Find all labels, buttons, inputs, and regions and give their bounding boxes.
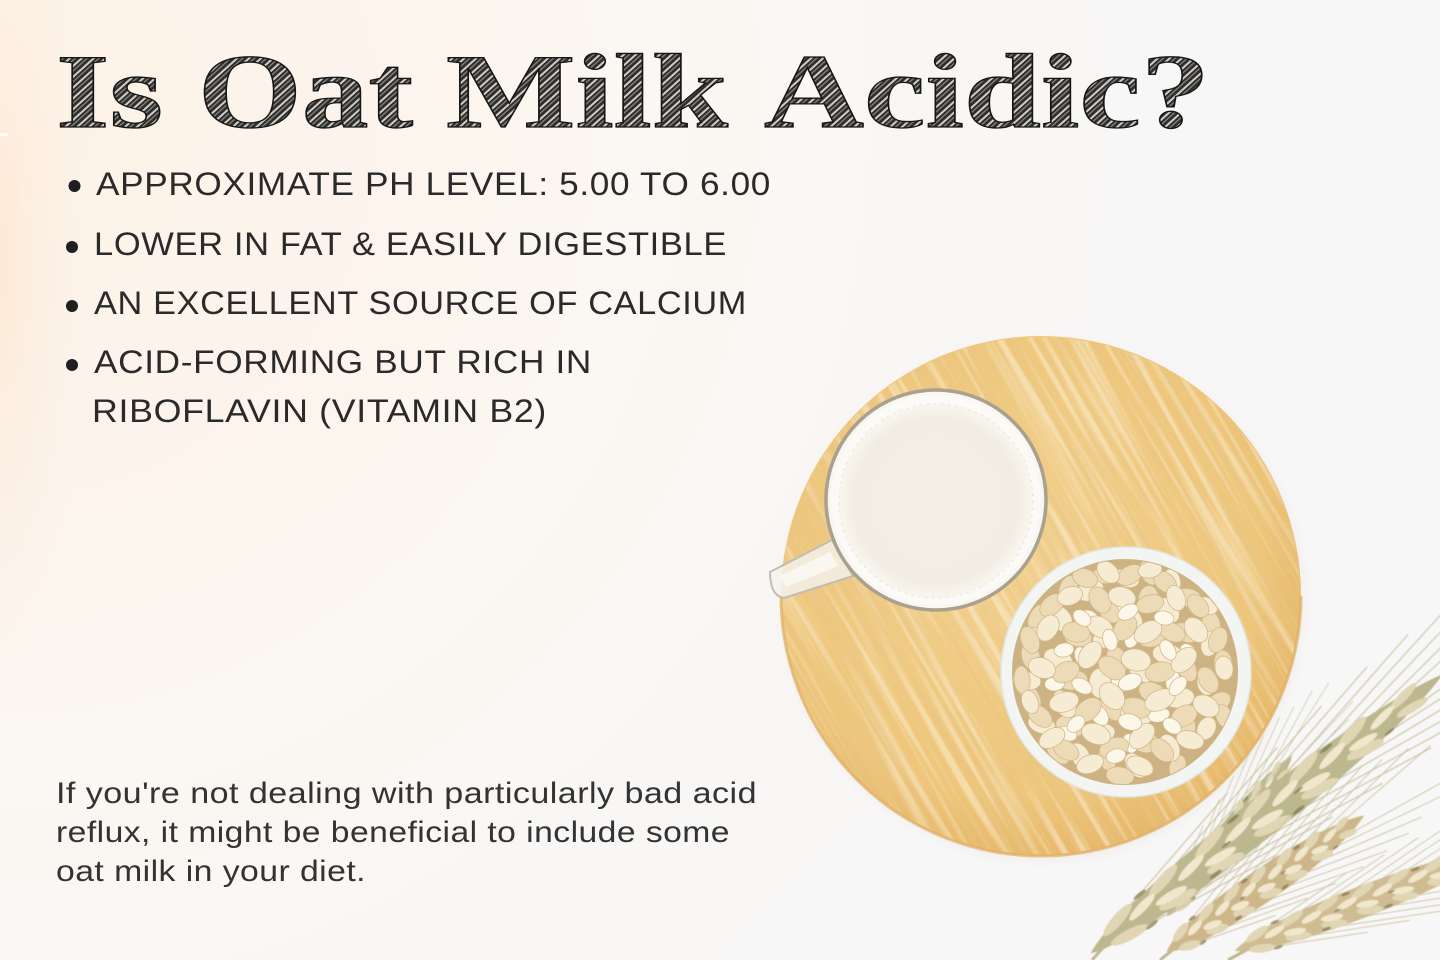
wooden cutting board [780,336,1302,858]
mug handle [770,540,853,598]
bullet: riboflavin [66,344,592,429]
wheat spike: middle [1166,744,1440,952]
title: Oat [198,33,413,150]
title: Acidic? [764,33,1210,150]
bullet: riboflavin: RIBOFLAVIN (VITAMIN B2) [92,393,547,429]
closing paragraph: reflux, it might be beneficial to include some [56,816,730,849]
bullet: riboflavin: ACID-FORMING BUT RICH IN [94,344,592,380]
milk surface [839,404,1033,598]
bowl of rolled oats [1000,546,1252,798]
closing paragraph: If you're not dealing with particularly bad acid [56,777,757,810]
bullet: calcium: AN EXCELLENT SOURCE OF CALCIUM [94,285,747,321]
bullet list [66,166,771,429]
closing paragraph [56,777,757,888]
title [56,33,1210,150]
oat flakes [1013,562,1233,784]
bullet: lower in fat: LOWER IN FAT & EASILY DIGESTIBLE [94,226,727,262]
mug rim [826,390,1046,610]
wheat spike: behind [1166,682,1354,917]
wheat stalks [1090,614,1440,960]
glass mug of oat milk [770,390,1046,610]
title: Milk [446,33,728,150]
bullet: pH level: APPROXIMATE PH LEVEL: 5.00 TO 6.00 [96,166,771,202]
closing paragraph: oat milk in your diet. [56,855,366,888]
title: Is [56,33,163,150]
wheat spike: main upper [1090,614,1440,954]
wheat stems [1090,948,1248,960]
wheat spike: lower [1234,830,1440,954]
